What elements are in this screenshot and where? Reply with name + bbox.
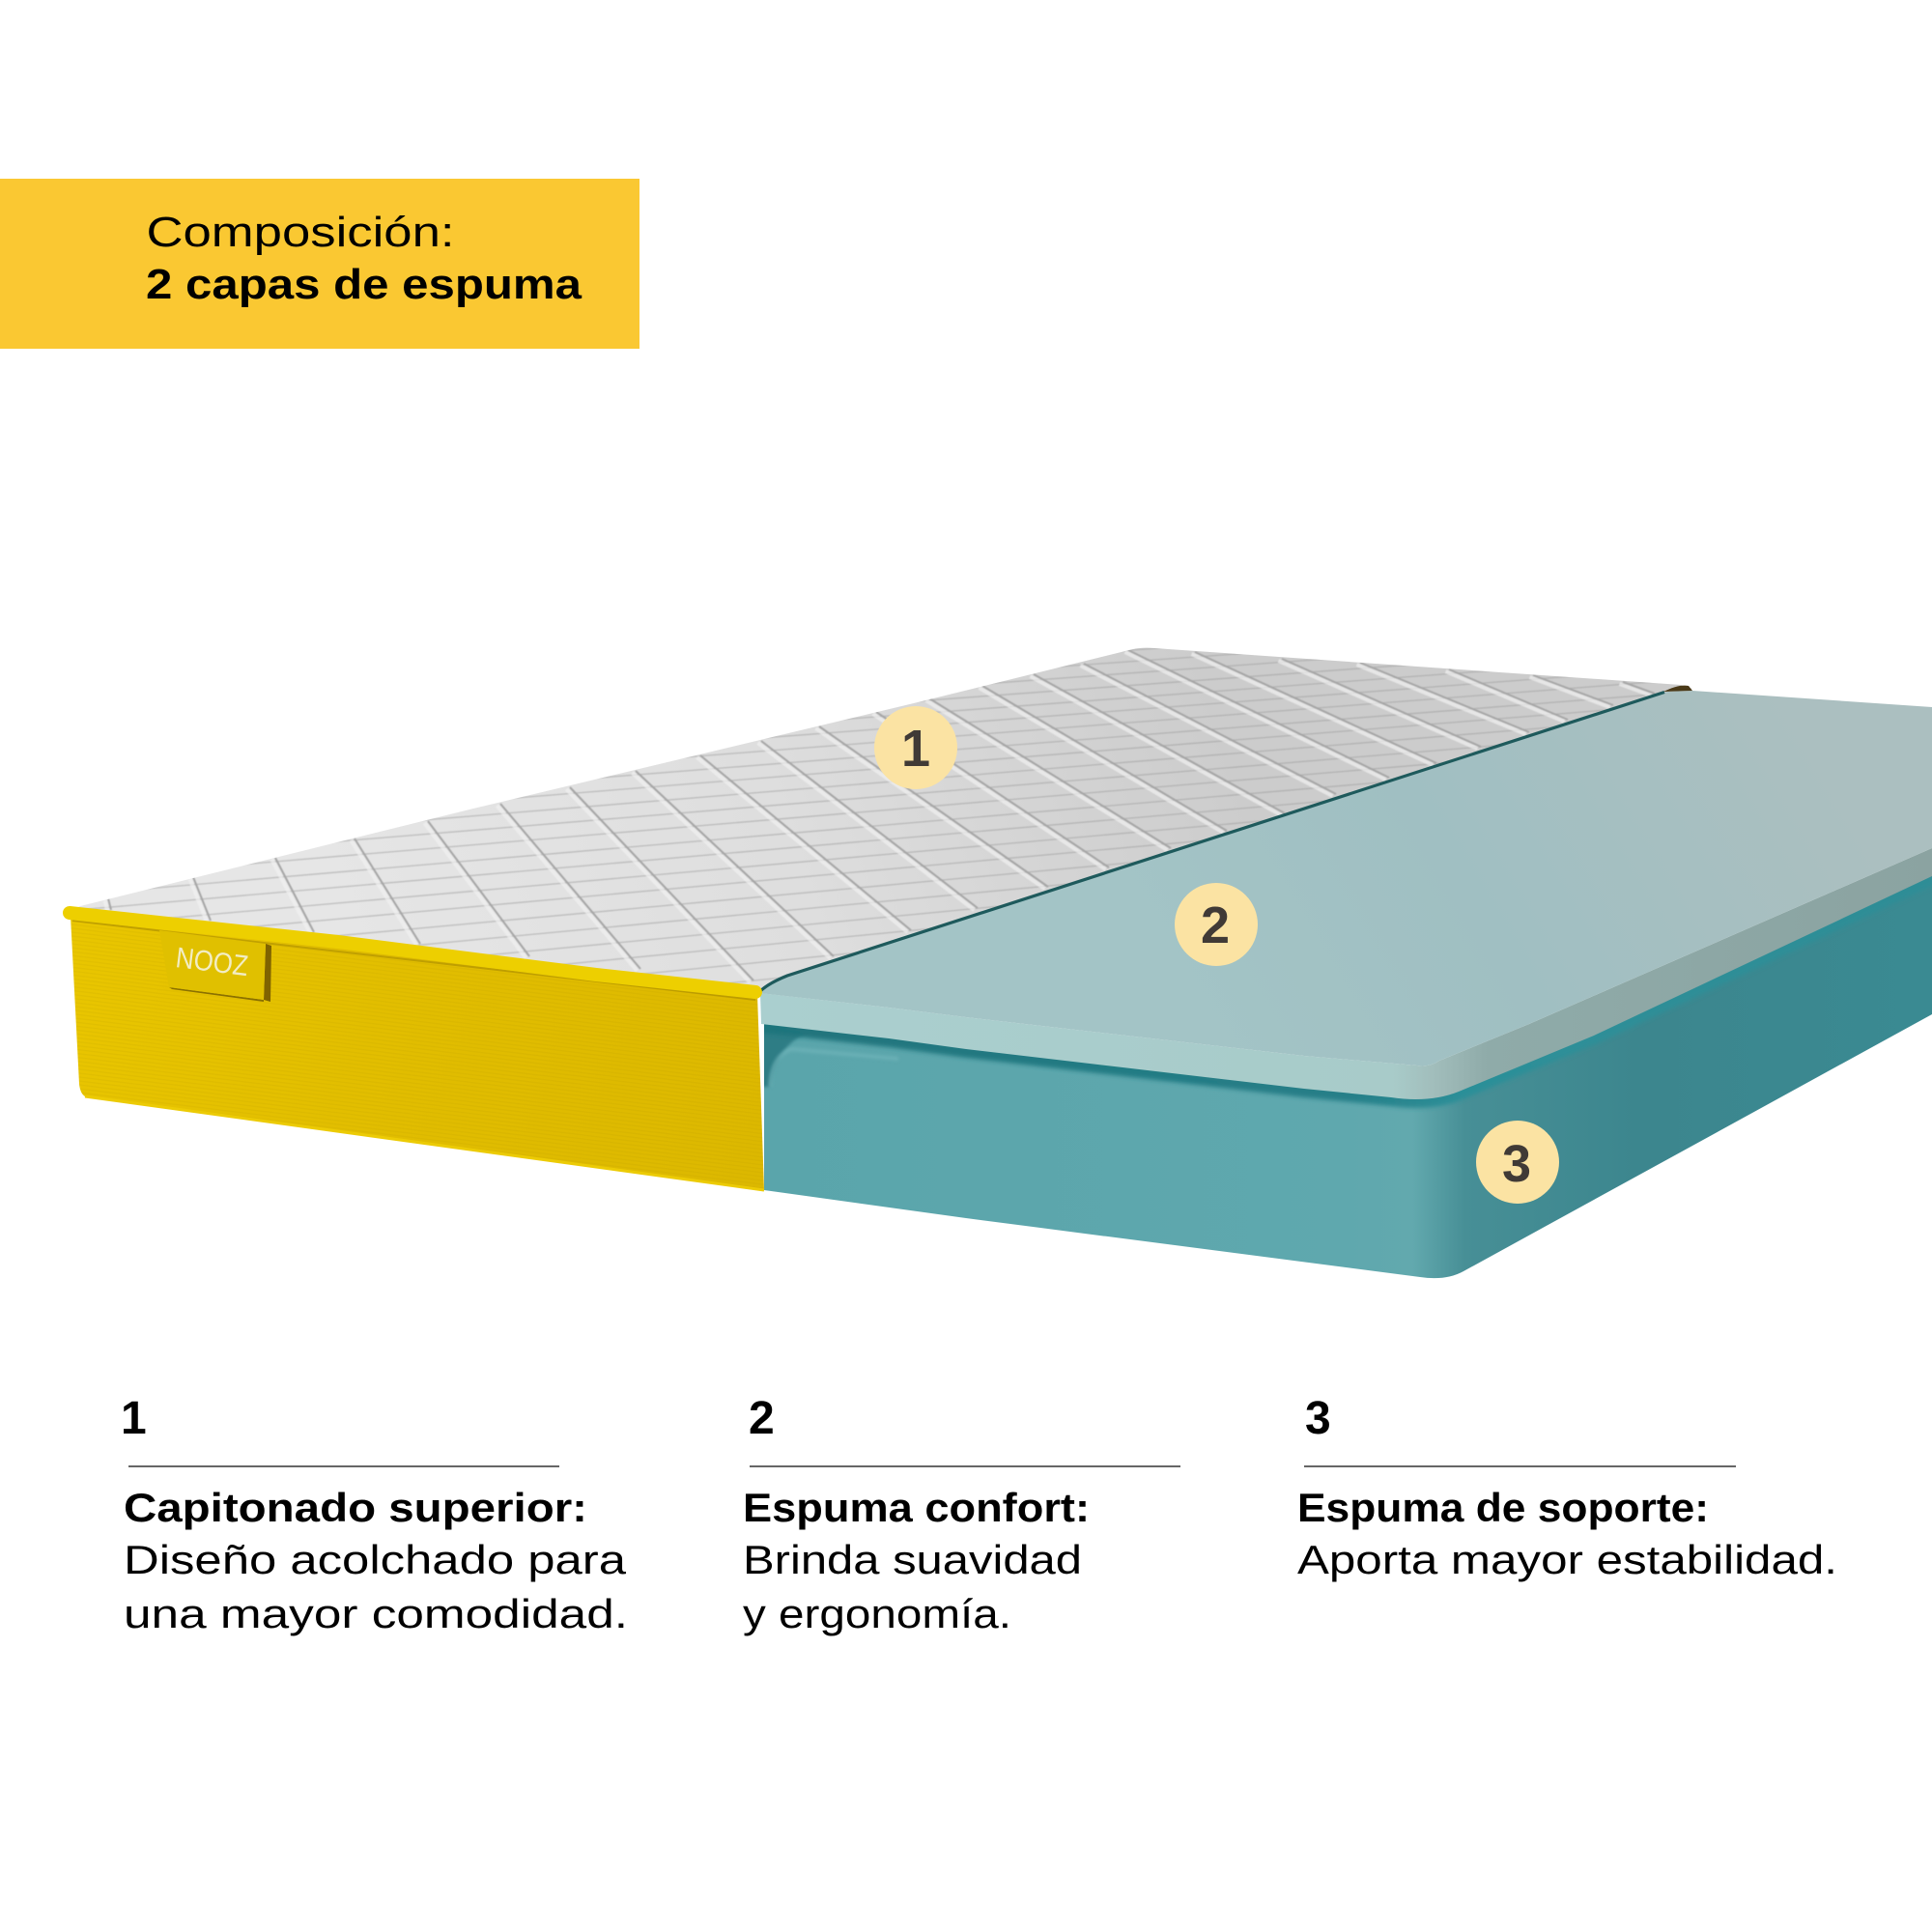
column 1: Capitonado superior: Diseño acolchado para bbox=[124, 1537, 627, 1582]
column 2: Espuma confort: Espuma confort: bbox=[743, 1485, 1090, 1530]
column 3: Espuma de soporte: Aporta mayor estabilidad. bbox=[1297, 1537, 1837, 1582]
column 1: Capitonado superior: Capitonado superior: bbox=[124, 1485, 587, 1530]
column 2: Espuma confort bbox=[743, 1393, 1180, 1636]
dark recess at rounded corner bbox=[764, 1031, 800, 1088]
fabric bottom hem bbox=[85, 1096, 764, 1190]
marker 1: 1 bbox=[901, 720, 930, 778]
marker 3 bbox=[1476, 1121, 1559, 1204]
layer 2: comfort foam top bbox=[759, 691, 1932, 1065]
marker 2 bbox=[1175, 883, 1258, 966]
shadow under piping bbox=[72, 921, 755, 1000]
yellow side fabric bbox=[71, 916, 764, 1190]
dark seam line bbox=[759, 692, 1664, 992]
banner text: 2 capas de espuma: 2 capas de espuma bbox=[146, 261, 582, 308]
NOOZ fabric label bbox=[159, 930, 271, 1002]
column 2: Espuma confort: 2 bbox=[749, 1393, 775, 1444]
column 1: Capitonado superior: 1 bbox=[121, 1393, 147, 1444]
column 2: Espuma confort: y ergonomía. bbox=[743, 1591, 1011, 1636]
seam end cap bbox=[1663, 686, 1692, 692]
column 2: Espuma confort: Brinda suavidad bbox=[743, 1537, 1082, 1582]
marker 3: 3 bbox=[1502, 1135, 1531, 1193]
banner: composition bbox=[0, 179, 639, 349]
NOOZ fabric label: NOOZ bbox=[174, 942, 250, 982]
column 3: Espuma de soporte: 3 bbox=[1305, 1393, 1331, 1444]
shadow band under comfort foam bbox=[761, 876, 1932, 1099]
column 3: Espuma de soporte: Espuma de soporte: bbox=[1297, 1485, 1709, 1530]
layer 1: quilted top surface bbox=[79, 647, 1692, 988]
column 1: Capitonado superior bbox=[121, 1393, 628, 1636]
column 1: Capitonado superior: una mayor comodidad. bbox=[124, 1591, 628, 1636]
column 3: Espuma de soporte bbox=[1297, 1393, 1837, 1582]
yellow piping bbox=[70, 913, 755, 992]
layer 3: support foam base bbox=[764, 865, 1932, 1278]
rounded corner highlight bbox=[770, 1049, 898, 1087]
marker 1 bbox=[874, 706, 957, 789]
banner text: Composición: Composición: bbox=[147, 209, 454, 256]
marker 2: 2 bbox=[1201, 896, 1230, 954]
quilting lines bbox=[89, 648, 1656, 983]
layer 3: details clipped to the base bbox=[758, 876, 1932, 1099]
layer 2: comfort foam side bbox=[760, 848, 1932, 1099]
mattress illustration bbox=[0, 608, 1932, 1278]
